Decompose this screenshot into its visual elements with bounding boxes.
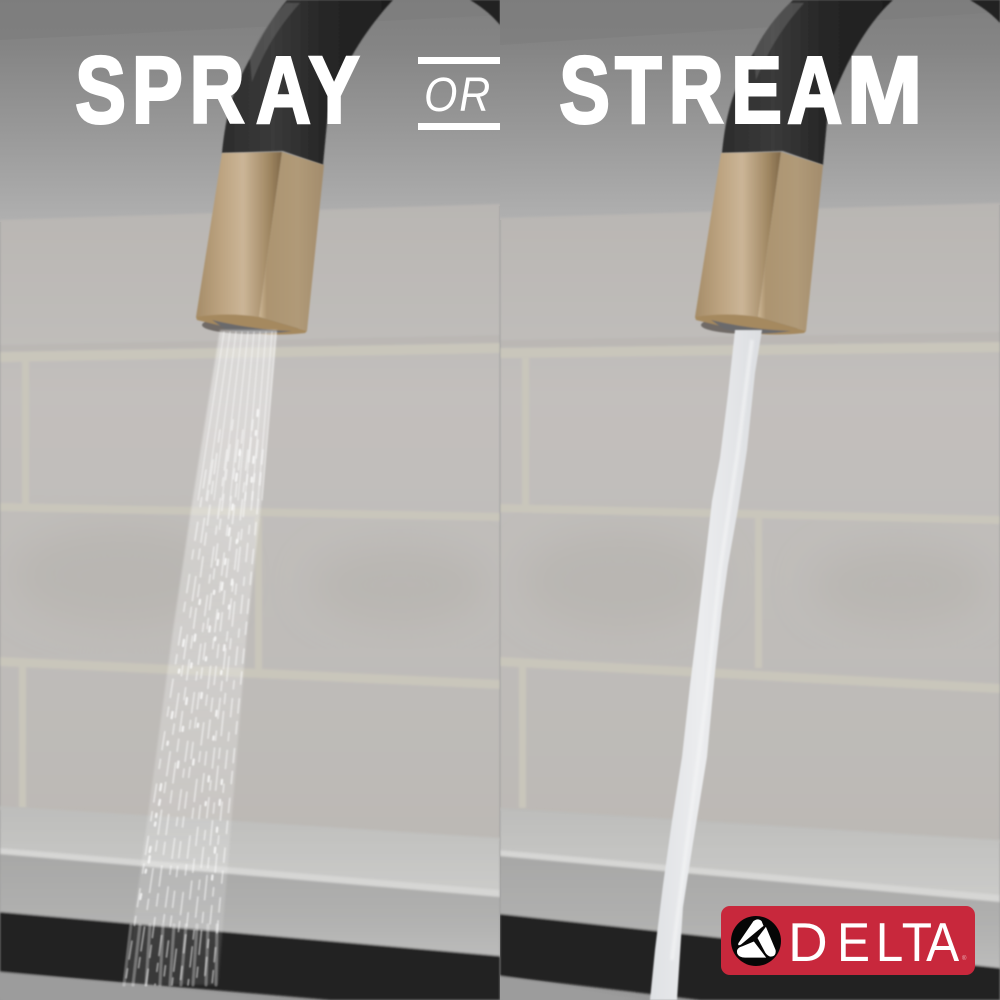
heading word: SPRAY: SPRAY [75,37,359,143]
aerator head in brass [196,152,324,335]
logo: Delta: ELTA [837,913,959,974]
spray water [124,330,277,985]
countertop [0,806,500,1000]
faucet neck [222,0,500,165]
heading word: STREAM: M [847,36,922,143]
logo: Delta: ® [962,955,967,962]
panel: spray (left photo) [0,0,500,1000]
upper wall [0,0,500,222]
connector word: OR with rules [418,57,500,130]
countertop [500,808,1000,1000]
upper wall [500,0,1000,220]
aerator head in brass [695,152,823,335]
heading word: STREAM: STREA [559,37,842,143]
tiled backsplash [0,204,500,840]
connector word: OR with rules: OR [424,69,492,122]
panel: stream (right photo) [500,0,1000,1000]
logo: Delta [721,906,975,975]
logo: Delta: D [788,911,828,973]
stream water [650,330,762,1000]
tiled backsplash [500,203,1000,842]
faucet neck [722,0,1000,165]
